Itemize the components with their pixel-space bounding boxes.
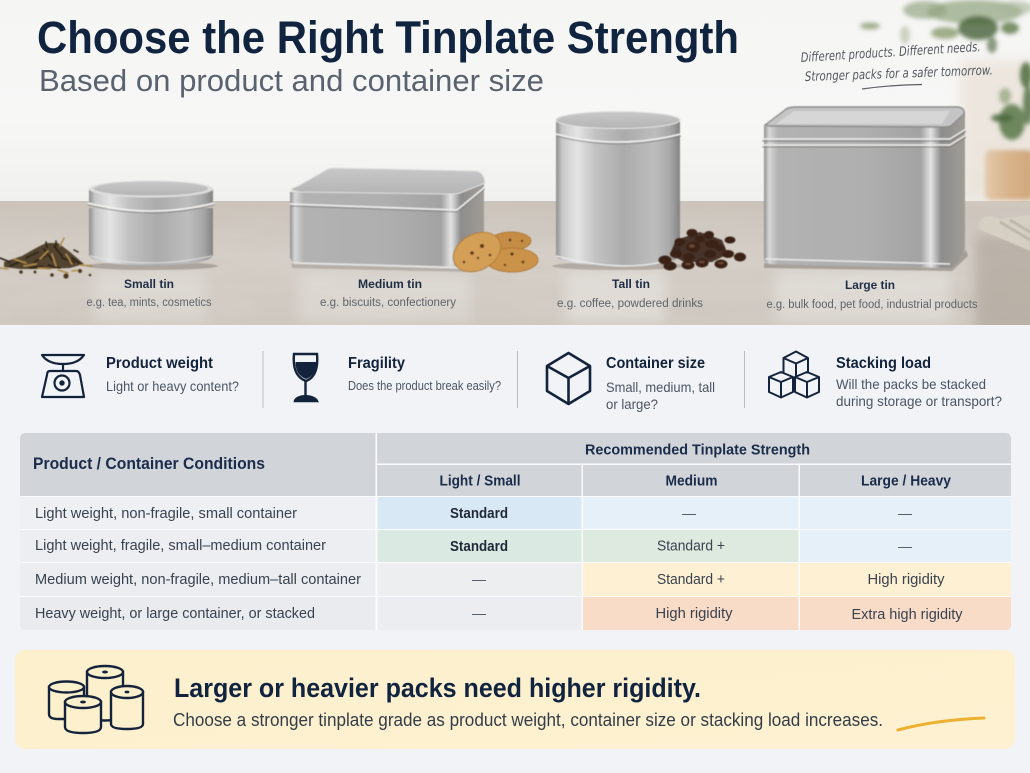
- row: light, fragile, small-medium: Standard +: [657, 538, 725, 554]
- row: heavy, large or stacked: Heavy weight, or large container, or stacked: [35, 606, 315, 622]
- plant and vase: [860, 0, 1030, 200]
- text: fragility: [348, 355, 501, 393]
- icon: cube: [547, 353, 590, 404]
- text: container size: Container size: [606, 355, 705, 372]
- label: medium tin: [320, 277, 456, 309]
- table header: Light / Small: [440, 474, 520, 490]
- table header: Recommended Tinplate Strength: [585, 442, 810, 458]
- tall tin: [552, 112, 684, 270]
- row: medium, non-fragile, medium-tall: —: [472, 571, 486, 587]
- tea leaves: [0, 238, 92, 279]
- label: medium tin: e.g. biscuits, confectionery: [320, 297, 456, 309]
- label: tall tin: e.g. coffee, powdered drinks: [557, 298, 703, 310]
- row: heavy, large or stacked: High rigidity: [656, 606, 733, 622]
- text: product weight: [106, 355, 239, 394]
- label: small tin: e.g. tea, mints, cosmetics: [86, 297, 212, 309]
- label: medium tin: Medium tin: [358, 277, 422, 291]
- text: product weight: Product weight: [106, 355, 214, 372]
- label: large tin: e.g. bulk food, pet food, industrial products: [766, 299, 978, 311]
- cookies: [452, 230, 540, 274]
- small tin: [86, 180, 218, 270]
- icon: wine glass: [294, 354, 317, 401]
- icon: stacked boxes: [769, 352, 819, 398]
- row: light, fragile, small-medium: [20, 530, 1011, 562]
- text: stacking load: during storage or transport?: [836, 393, 1002, 409]
- table: [20, 433, 1011, 630]
- row: light, non-fragile, small: —: [682, 505, 696, 521]
- large tin: [762, 107, 968, 271]
- callout heading: Larger or heavier packs need higher rigidity.: [174, 673, 701, 703]
- subtitle: Based on product and container size: [39, 63, 544, 98]
- icon: kitchen scale: [42, 355, 84, 397]
- label: tall tin: Tall tin: [612, 277, 650, 291]
- label: small tin: [86, 277, 212, 309]
- label: large tin: [766, 278, 978, 311]
- text: container size: Small, medium, tall: [606, 379, 715, 395]
- row: light, non-fragile, small: [20, 497, 1011, 529]
- row: heavy, large or stacked: —: [472, 605, 486, 621]
- row: medium, non-fragile, medium-tall: Standard +: [657, 572, 725, 588]
- title: Choose the Right Tinplate Strength: [37, 12, 739, 63]
- text: stacking load: [836, 355, 1002, 409]
- table header: Product / Container Conditions: [33, 454, 265, 473]
- medium tin: [290, 168, 486, 272]
- row: medium, non-fragile, medium-tall: [20, 563, 1011, 596]
- text: stacking load: Stacking load: [836, 355, 931, 372]
- handwritten note: Different products. Different needs.: [800, 40, 981, 66]
- icon: tin rolls: [49, 666, 143, 733]
- row: light, fragile, small-medium: Light weight, fragile, small–medium container: [35, 538, 326, 554]
- text: fragility: Does the product break easily?: [348, 378, 501, 393]
- text: fragility: Fragility: [348, 355, 405, 372]
- row: medium, non-fragile, medium-tall: High rigidity: [868, 572, 945, 588]
- row: heavy, large or stacked: [20, 597, 1011, 630]
- row: heavy, large or stacked: Extra high rigidity: [852, 607, 963, 623]
- text: container size: or large?: [606, 396, 658, 412]
- row: light, fragile, small-medium: Standard: [450, 539, 508, 555]
- panel: photo of tins on counter: [0, 0, 1030, 335]
- accent swoosh: [898, 718, 984, 730]
- row: light, non-fragile, small: Light weight, non-fragile, small container: [35, 506, 297, 522]
- label: large tin: Large tin: [845, 278, 895, 292]
- towel: [979, 215, 1030, 251]
- callout: [15, 650, 1015, 749]
- panel: factors row: [42, 351, 1002, 412]
- table header: [20, 433, 1011, 496]
- row: light, fragile, small-medium: —: [898, 538, 912, 554]
- label: small tin: Small tin: [124, 277, 174, 291]
- table header: Large / Heavy: [861, 474, 951, 490]
- row: light, non-fragile, small: Standard: [450, 506, 508, 522]
- handwritten note: [800, 40, 993, 89]
- callout text: Choose a stronger tinplate grade as product weight, container size or stacking load increases.: [173, 710, 883, 730]
- label: tall tin: [557, 277, 703, 310]
- row: medium, non-fragile, medium-tall: Medium weight, non-fragile, medium–tall container: [35, 572, 361, 588]
- coffee beans: [658, 229, 746, 270]
- row: light, non-fragile, small: —: [898, 505, 912, 521]
- text: container size: [606, 355, 715, 412]
- table header: Medium: [666, 474, 718, 490]
- text: product weight: Light or heavy content?: [106, 378, 239, 394]
- text: stacking load: Will the packs be stacked: [836, 376, 986, 392]
